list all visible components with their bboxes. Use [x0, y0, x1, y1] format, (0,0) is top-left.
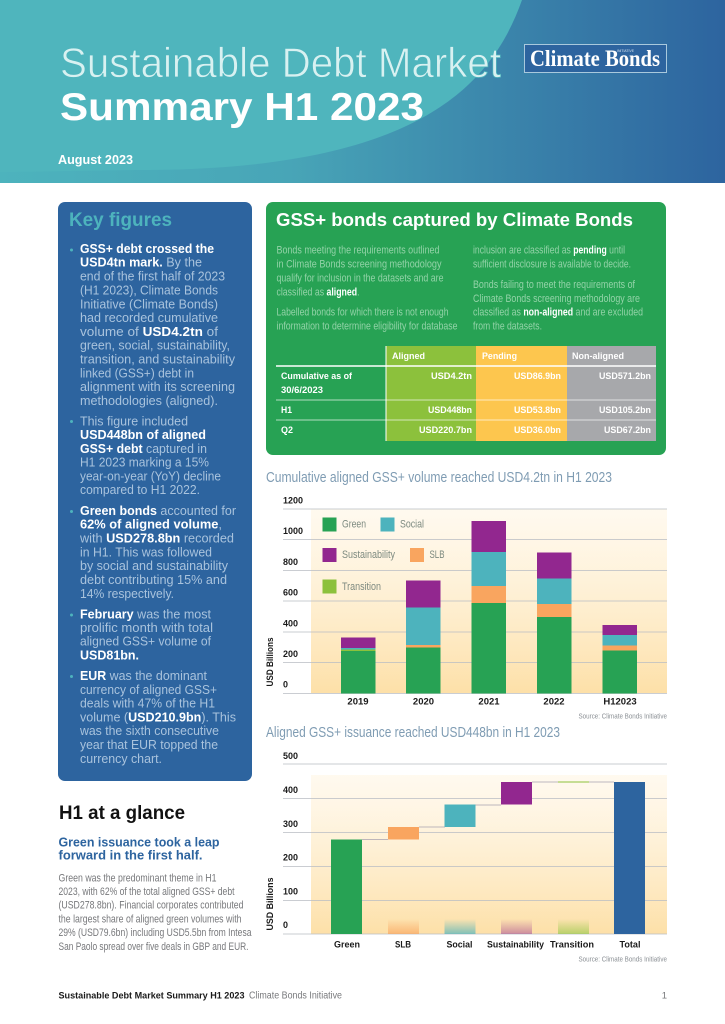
page number: 1	[662, 990, 667, 1002]
subheading: forward in the first half.	[58, 848, 202, 862]
legend: SLB	[430, 549, 444, 561]
table: USD53.8bn	[514, 405, 561, 416]
bullet: GSS+ debt crossed USD4tn: linked (GSS+) debt in	[80, 365, 194, 380]
y axis labels: 400	[283, 618, 298, 630]
text column left: in Climate Bonds screening methodology	[276, 258, 442, 270]
bullet: EUR: currency chart.	[80, 751, 162, 766]
table: USD4.2tn	[431, 371, 472, 382]
body text: 2023, with 62% of the total aligned GSS+ debt	[58, 886, 235, 898]
bullet: USD448bn of aligned debt: This figure included	[80, 413, 188, 428]
bullet: green bonds share: Green bonds accounted for	[80, 503, 237, 518]
text column left: information to determine eligibility for database	[276, 320, 458, 332]
table: USD67.2bn	[604, 425, 651, 436]
chart title: cumulative volume: Cumulative aligned GSS+ volume reached USD4.2tn in H1 2023	[266, 469, 612, 486]
table: Q2	[281, 425, 293, 436]
bullet: GSS+ debt crossed USD4tn: transition, and sustainability	[80, 351, 235, 366]
bullet: USD448bn of aligned debt: USD448bn of aligned	[80, 427, 206, 442]
heading: key figures: Key figures	[69, 210, 172, 231]
header banner	[0, 0, 725, 183]
panel: H1 at a glance	[58, 803, 252, 953]
text column right: from the datasets.	[473, 320, 542, 332]
text column left: Labelled bonds for which there is not enough	[276, 306, 448, 318]
y axis labels: 300	[283, 819, 298, 830]
x axis labels: H12023	[603, 696, 637, 708]
y axis labels: 200	[283, 852, 298, 864]
text column right: inclusion are classified as pending until	[473, 244, 625, 256]
bullet: EUR: was the sixth consecutive	[79, 723, 219, 738]
table: Aligned	[392, 351, 425, 362]
text column left	[276, 244, 458, 332]
bar: 2022	[537, 552, 572, 694]
bullet: GSS+ debt crossed USD4tn: methodologies (aligned).	[80, 393, 218, 408]
bullet: GSS+ debt crossed USD4tn: had recorded cumulative	[80, 310, 218, 325]
x axis labels	[347, 696, 637, 708]
bullet: USD448bn of aligned debt: year-on-year (YoY) decline	[80, 469, 221, 484]
x axis labels: 2021	[478, 696, 500, 708]
x axis labels: 2022	[543, 696, 565, 708]
subheading: Green issuance took a leap	[58, 834, 220, 850]
legend: Social	[400, 518, 424, 530]
text column right: Bonds failing to meet the requirements of	[473, 279, 636, 291]
x axis labels: Social	[446, 940, 472, 950]
y axis labels: 400	[283, 785, 298, 796]
bar: SLB	[388, 827, 419, 934]
bar: Transition	[558, 782, 589, 934]
footer: Sustainable Debt Market Summary H1 2023	[58, 990, 244, 1002]
y axis labels: 500	[283, 751, 298, 762]
bullet: February: aligned GSS+ volume of	[80, 634, 211, 649]
y axis labels: 0	[283, 920, 288, 931]
bullet: GSS+ debt crossed USD4tn	[70, 241, 235, 408]
table: Pending	[482, 351, 517, 362]
bullet: green bonds share: with USD278.8bn recorded	[79, 531, 234, 546]
title: Sustainable Debt Market	[60, 39, 501, 86]
bullet: February	[70, 606, 213, 663]
table	[276, 346, 656, 441]
y axis labels: 1000	[283, 526, 303, 537]
axis title: USD Billions	[265, 638, 276, 686]
y axis labels: 800	[283, 557, 298, 568]
bullet: USD448bn of aligned debt	[70, 413, 221, 497]
legend	[322, 518, 444, 594]
bullet: GSS+ debt crossed USD4tn: GSS+ debt crossed the	[80, 241, 214, 256]
x axis labels: Transition	[550, 940, 594, 950]
y axis labels: 200	[283, 649, 298, 660]
waterfall chart: aligned GSS+ issuance	[265, 751, 667, 964]
body text: 29% (USD79.6bn) including USD5.5bn from Intesa	[58, 927, 252, 939]
legend: Sustainability	[342, 549, 395, 561]
logo: Climate Bonds: INITIATIVE	[617, 49, 635, 53]
legend: Green	[342, 518, 366, 530]
x axis labels: SLB	[395, 940, 411, 950]
text column right: classified as non-aligned and are excluded	[473, 306, 643, 318]
heading: GSS+ bonds: GSS+ bonds captured by Climate Bonds	[276, 209, 633, 230]
x axis labels	[334, 940, 640, 950]
bullet: GSS+ debt crossed USD4tn: (H1 2023), Climate Bonds	[80, 283, 218, 298]
table: USD36.0bn	[514, 425, 561, 436]
x axis labels: 2020	[413, 696, 434, 708]
bullet: USD448bn of aligned debt: H1 2023 marking a 15%	[80, 455, 209, 470]
body text	[58, 872, 252, 953]
y axis labels	[283, 751, 298, 931]
source note: Source: Climate Bonds Initiative	[578, 712, 667, 720]
table: Cumulative as of	[281, 371, 353, 382]
bullet: GSS+ debt crossed USD4tn: green, social, sustainability,	[80, 338, 230, 353]
y axis labels: 100	[283, 886, 298, 898]
bullet: February: February was the most	[80, 606, 211, 621]
bar: Sustainability	[501, 782, 532, 934]
bullet: EUR	[70, 668, 236, 766]
bullet: February: prolific month with total	[80, 620, 213, 635]
text column right: Climate Bonds screening methodology are	[473, 293, 640, 305]
bullet: GSS+ debt crossed USD4tn: USD4tn mark. By the	[80, 255, 202, 270]
text column left: classified as aligned.	[276, 286, 360, 298]
bullet: February: USD81bn.	[80, 648, 139, 663]
bullet: EUR: currency of aligned GSS+	[80, 682, 217, 697]
table: USD86.9bn	[514, 371, 561, 382]
panel: key figures	[58, 202, 252, 781]
bullet: EUR: year that EUR topped the	[80, 737, 218, 752]
text column left: qualify for inclusion in the datasets and are	[276, 272, 444, 284]
bullet: GSS+ debt crossed USD4tn: end of the first half of 2023	[80, 269, 225, 284]
bullet: EUR: EUR was the dominant	[80, 668, 207, 683]
bar: 2020	[406, 580, 440, 694]
bar: 2021	[472, 521, 506, 694]
table: USD220.7bn	[419, 425, 472, 436]
footer: Climate Bonds Initiative	[249, 990, 342, 1002]
bullet: GSS+ debt crossed USD4tn: Initiative (Climate Bonds)	[80, 296, 218, 311]
bullet: EUR: volume (USD210.9bn). This	[80, 710, 236, 725]
bar: 2019	[341, 638, 376, 694]
bullet: EUR: deals with 47% of the H1	[80, 696, 215, 711]
bullet: green bonds share: by social and sustainability	[80, 558, 228, 573]
text column right	[473, 244, 643, 332]
table: USD105.2bn	[599, 405, 651, 416]
table: Non-aligned	[572, 351, 624, 362]
axis title: USD Billions	[265, 878, 276, 930]
body text: San Paolo spread over five deals in GBP and EUR.	[58, 941, 248, 953]
table: H1	[281, 405, 293, 416]
bar chart: cumulative aligned GSS+ volume	[265, 496, 667, 720]
x axis labels: Green	[334, 940, 360, 950]
connectors	[362, 782, 614, 840]
source note: Source: Climate Bonds Initiative	[578, 954, 667, 964]
chart title: H1 issuance: Aligned GSS+ issuance reached USD448bn in H1 2023	[266, 724, 560, 741]
title: Summary H1 2023	[60, 86, 424, 129]
bar: Social	[444, 804, 476, 934]
y axis labels: 1200	[283, 496, 303, 506]
panel: GSS+ bonds captured	[266, 202, 666, 455]
bar: Green	[331, 840, 362, 934]
body text: Green was the predominant theme in H1	[58, 872, 217, 884]
subheading	[58, 834, 220, 862]
y axis labels	[283, 496, 303, 690]
date: August 2023	[58, 153, 133, 167]
y axis labels: 0	[283, 680, 288, 690]
table: 30/6/2023	[281, 385, 323, 396]
logo: Climate Bonds: Climate Bonds	[530, 46, 660, 71]
table: USD448bn	[428, 405, 472, 416]
bullet: green bonds share: 62% of aligned volume,	[80, 517, 222, 532]
bullet: GSS+ debt crossed USD4tn: alignment with its screening	[80, 379, 235, 394]
bar: H1 2023	[602, 625, 637, 694]
bar: Total	[614, 782, 645, 934]
text column right: sufficient disclosure is available to decide.	[473, 258, 631, 270]
table: USD571.2bn	[599, 371, 651, 382]
bullet: green bonds share	[70, 503, 237, 601]
bullet: green bonds share: debt contributing 15% and	[80, 572, 227, 587]
x axis labels: Total	[620, 940, 640, 950]
x axis labels: 2019	[347, 696, 369, 708]
heading: H1 at a glance: H1 at a glance	[59, 803, 185, 824]
text column left: Bonds meeting the requirements outlined	[276, 244, 440, 256]
bullet: USD448bn of aligned debt: compared to H1 2022.	[80, 482, 200, 497]
legend: Transition	[342, 581, 381, 593]
bullet: USD448bn of aligned debt: GSS+ debt captured in	[80, 441, 207, 456]
body text: the largest share of aligned green volumes with	[58, 914, 242, 926]
title	[60, 39, 501, 129]
x axis labels: Sustainability	[487, 940, 545, 950]
bullet: green bonds share: in H1. This was followed	[80, 544, 212, 559]
footer	[58, 990, 667, 1002]
body text: (USD278.8bn). Financial corporates contributed	[58, 900, 244, 912]
y axis labels: 600	[283, 588, 298, 598]
bullet: GSS+ debt crossed USD4tn: volume of USD4.2tn of	[80, 324, 218, 339]
bullet: green bonds share: 14% respectively.	[80, 586, 174, 601]
